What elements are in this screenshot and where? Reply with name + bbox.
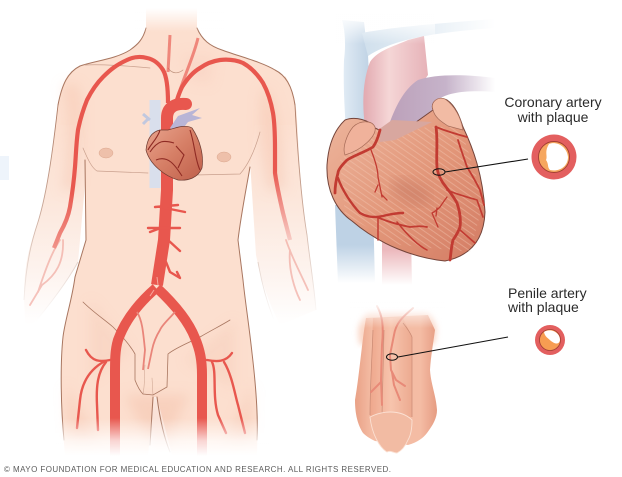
- right atrial appendage: [344, 122, 375, 155]
- label: coronary artery second line: with plaque: [517, 109, 589, 125]
- shaft: [370, 318, 412, 417]
- pale vein behind heart: [143, 100, 155, 188]
- right arm: [248, 76, 316, 325]
- left arm: [24, 75, 90, 335]
- aorta: [363, 36, 428, 142]
- artery highlight: [150, 277, 158, 296]
- penile arteries: [371, 306, 413, 405]
- icon: coronary artery cross-section: [532, 134, 576, 180]
- superior vena cava: [342, 20, 372, 135]
- nipples: [99, 148, 231, 162]
- upper vessel branch: [362, 19, 495, 56]
- soft skin glow: [358, 312, 436, 345]
- label: penile artery with plaque: Penile artery: [508, 285, 587, 301]
- shaft lines: [370, 323, 412, 417]
- fade above vessels: [335, 14, 435, 44]
- fades for head and feet: [55, 0, 270, 462]
- heart body: [327, 99, 485, 261]
- arm outlines fading down: [24, 105, 316, 325]
- illustration: penile anatomy view: [350, 302, 445, 453]
- glans: [370, 412, 412, 453]
- body outlines: [58, 28, 295, 452]
- leader line: coronary artery: [433, 159, 528, 175]
- inferior vena cava: [335, 205, 375, 284]
- label: coronary artery with plaque: Coronary artery: [504, 94, 602, 110]
- scrotum: [355, 315, 437, 445]
- copyright: © MAYO FOUNDATION FOR MEDICAL EDUCATION AND RESEARCH. ALL RIGHTS RESERVED.: [4, 465, 391, 474]
- label: penile artery second line: with plaque: [507, 299, 579, 315]
- grey-pink root: [378, 120, 432, 142]
- illustration: large heart: [327, 14, 495, 286]
- coronary arteries: [335, 127, 484, 260]
- arm artery branches: [30, 240, 308, 305]
- small heart: [146, 108, 203, 180]
- decorative edge tint: [0, 156, 9, 180]
- icon: penile artery cross-section: [535, 325, 565, 355]
- torso and legs: [60, 0, 295, 455]
- darker shading: [392, 178, 430, 205]
- top fade: [350, 302, 445, 328]
- muscle fibre texture: [340, 126, 484, 252]
- leader line: penile artery: [386, 337, 508, 360]
- illustration: full body with arteries: [24, 0, 316, 462]
- arteries: [54, 35, 290, 460]
- left atrial appendage: [432, 98, 463, 130]
- body shading: [62, 55, 285, 450]
- pulmonary artery: [383, 75, 495, 142]
- descending aorta: [382, 235, 412, 286]
